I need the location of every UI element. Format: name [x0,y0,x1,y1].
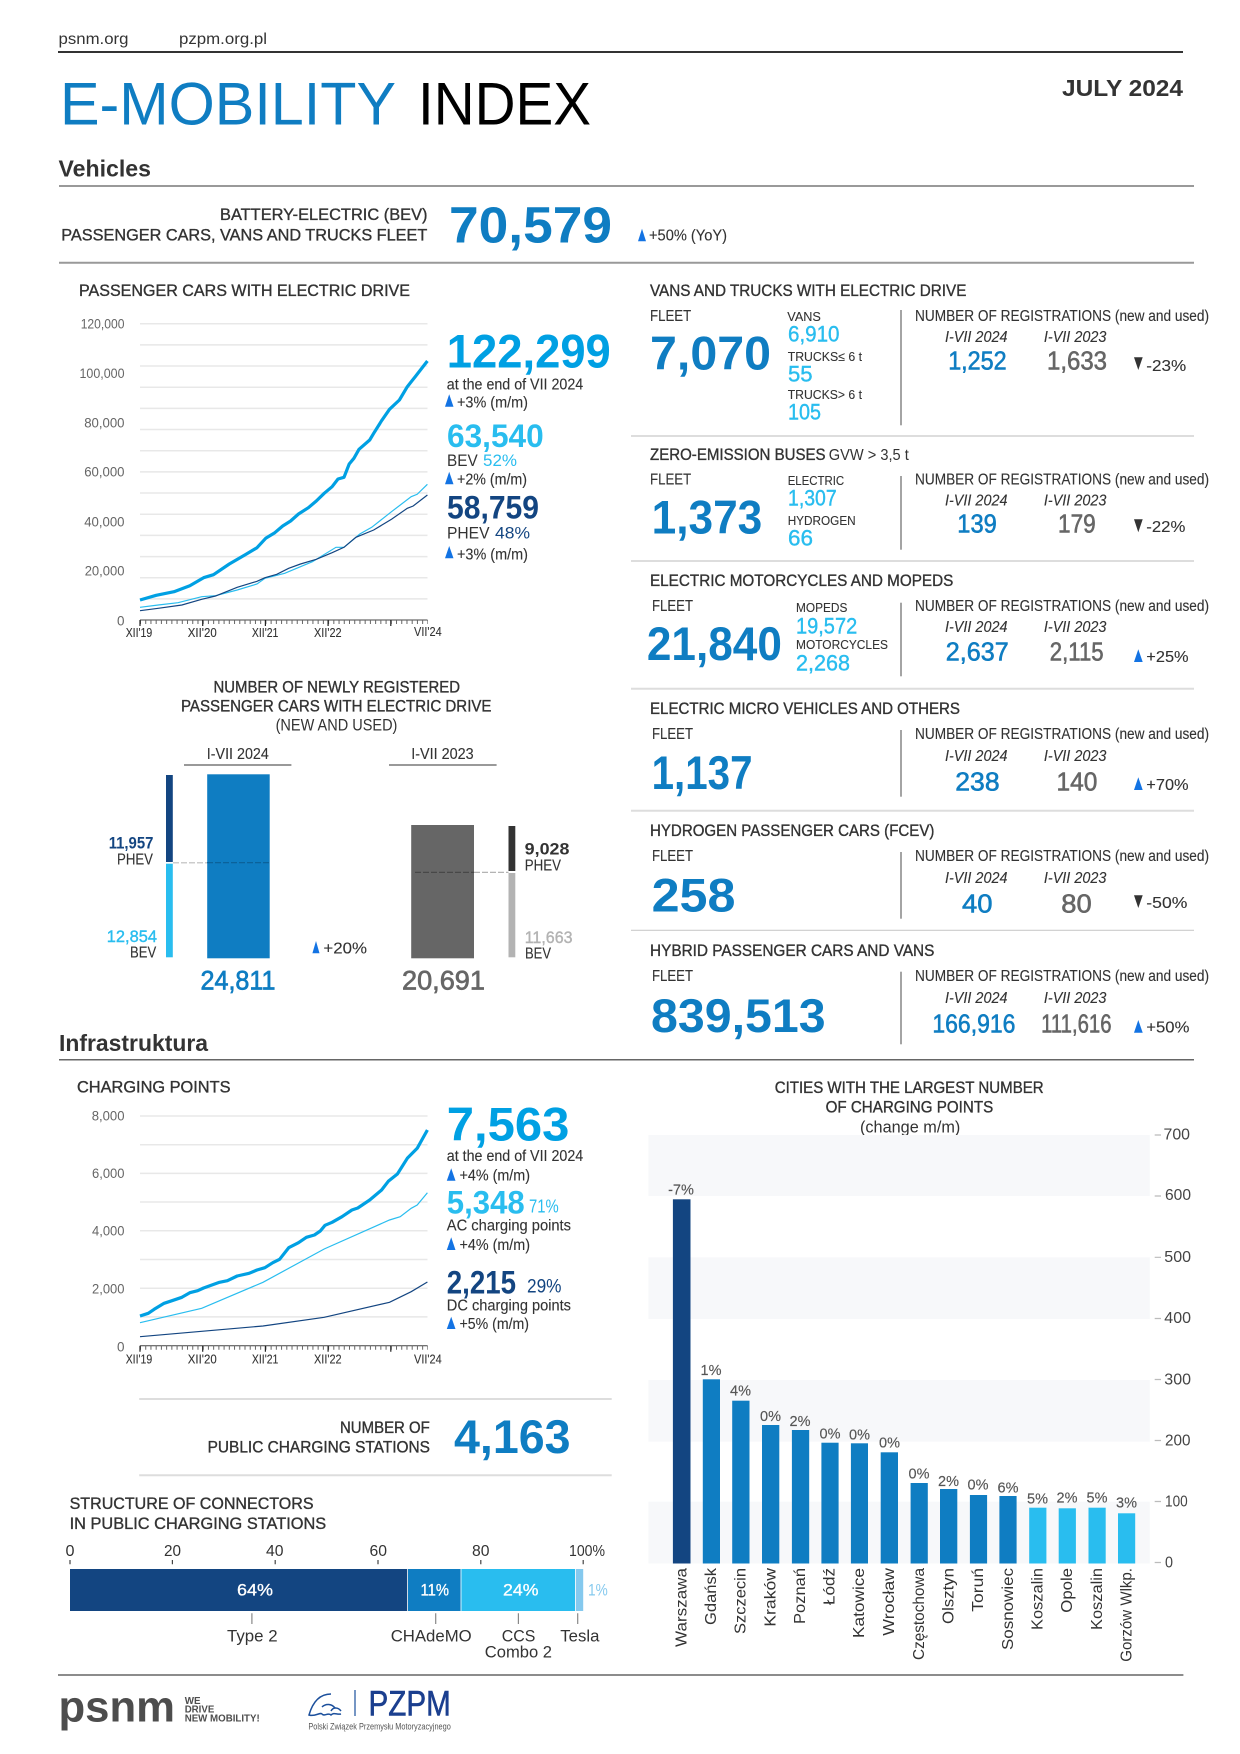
BEV fleet number: 70,579 [449,197,612,254]
date: JULY 2024 [1062,75,1183,101]
panel: motorcycles and mopeds: I-VII 2024 [945,619,1008,636]
panel: micro vehicles: I-VII 2023 [1044,748,1107,765]
panel: passenger car stats: +3% (m/m) [457,394,528,411]
change labels: 0% [909,1467,930,1483]
panel: hybrid cars [650,942,1209,1044]
panel: vans and trucks: I-VII 2024 [945,329,1008,346]
panel: vans and trucks: 1,252 [948,345,1007,375]
percentage axis: 60 [370,1543,387,1560]
period 2023: I-VII 2023 [411,746,474,763]
percentage axis: 100% [569,1543,605,1560]
connector labels: CCS [502,1627,535,1646]
change: +20% [323,940,367,957]
change labels: 2% [1057,1491,1078,1507]
panel: passenger car stats: 52% [483,452,517,470]
x axis: VII'24 [414,1352,442,1366]
x axis [126,620,442,640]
heading: vehicles: Vehicles [58,156,151,182]
change labels: 4% [730,1383,751,1399]
heading: PASSENGER CARS WITH ELECTRIC DRIVE [181,698,492,716]
stacked bar: 11% [420,1581,449,1600]
panel: hydrogen cars: I-VII 2024 [945,870,1008,887]
panel: zero-emission buses: GVW > 3,5 t [829,447,909,464]
line: PHEV [140,495,427,611]
connector labels [227,1613,600,1662]
panel: motorcycles and mopeds: I-VII 2023 [1044,619,1107,636]
panel: BEV fleet: BATTERY-ELECTRIC (BEV) [220,206,428,224]
panel: charging point stats: DC charging points [447,1298,571,1315]
panel: zero-emission buses: -22% [1146,519,1185,536]
heading [181,679,492,735]
panel: newly registered passenger cars [107,679,573,995]
bars [673,1199,1135,1564]
panel: charging point stats: 71% [529,1197,559,1217]
panel: passenger car stats: BEV [447,452,478,470]
heading [775,1079,1044,1136]
logo: PZPM [308,1685,451,1732]
percentage axis: 0 [66,1543,75,1560]
heading: OF CHARGING POINTS [826,1098,993,1116]
percentage axis [66,1543,605,1564]
title: INDEX [418,70,591,138]
panel: micro vehicles: 238 [955,767,1000,797]
panel: hybrid cars: I-VII 2023 [1044,990,1107,1007]
panel: passenger car stats: +3% (m/m) [457,546,528,563]
city labels: Warszawa [674,1568,690,1647]
heading: (NEW AND USED) [276,717,397,735]
header links: pzpm.org.pl [179,31,267,48]
panel: hybrid cars: I-VII 2024 [945,990,1008,1007]
panel: zero-emission buses: ELECTRIC [788,473,844,488]
panel: vans and trucks: FLEET [650,308,691,325]
label BEV 2024: BEV [130,944,156,961]
line: DC [140,1282,427,1337]
panel: micro vehicles: +70% [1146,777,1189,794]
panel: micro vehicles: ELECTRIC MICRO VEHICLES AND OTHERS [650,700,960,718]
panel: charging points chart [77,1079,442,1366]
right axis: 0 [1165,1554,1173,1572]
change labels: 5% [1027,1492,1048,1508]
city labels [674,1567,1136,1662]
city labels: Katowice [851,1568,868,1638]
panel: motorcycles and mopeds: 2,268 [796,650,850,675]
panel: micro vehicles: I-VII 2024 [945,748,1008,765]
panel: motorcycles and mopeds: 2,115 [1050,637,1104,667]
panel: charging point stats: at the end of VII 2024 [447,1148,584,1165]
panel: vans and trucks: VANS AND TRUCKS WITH ELECTRIC DRIVE [650,282,966,300]
bar 2024 [207,774,270,958]
panel: hydrogen cars: -50% [1146,895,1187,912]
logo: psnm: DRIVE [185,1705,215,1716]
city labels: Gdańsk [703,1567,720,1625]
heading: PASSENGER CARS WITH ELECTRIC DRIVE [79,282,410,300]
y axis labels: 20,000 [85,564,124,579]
x axis: XII'19 [126,1352,152,1366]
heading: NUMBER OF NEWLY REGISTERED [214,679,460,697]
heading: CHARGING POINTS [77,1079,230,1097]
panel: zero-emission buses: I-VII 2024 [945,492,1008,509]
percentage axis: 80 [472,1543,490,1560]
title: E-MOBILITY [60,70,396,138]
panel: zero-emission buses: ZERO-EMISSION BUSES [650,446,826,464]
right axis: 600 [1165,1187,1191,1204]
panel: passenger car stats: 48% [495,525,530,543]
panel: hydrogen cars: FLEET [652,848,693,865]
DC number: 2,215 [447,1264,516,1300]
connector labels: CHAdeMO [391,1627,472,1646]
heading: IN PUBLIC CHARGING STATIONS [70,1515,326,1533]
line: AC [140,1193,427,1323]
panel: hydrogen cars: I-VII 2023 [1044,870,1107,887]
label PHEV 2023: 9,028 [525,839,569,858]
label PHEV 2023 [525,839,569,875]
panel: micro vehicles: 140 [1056,767,1097,797]
header links: psnm.org [58,31,128,48]
label PHEV 2024: PHEV [117,852,153,869]
panel: hydrogen cars: HYDROGEN PASSENGER CARS (FCEV) [650,822,934,840]
connector labels: Tesla [560,1627,600,1646]
label BEV 2024 [107,927,157,961]
logo: psnm: NEW MOBILITY! [185,1714,260,1725]
change labels: 5% [1087,1491,1108,1507]
city labels: Łódź [822,1568,838,1605]
period 2024: I-VII 2024 [207,746,269,763]
heading: STRUCTURE OF CONNECTORS [70,1495,314,1513]
x axis: XII'22 [314,626,342,640]
icon: up arrow [638,229,646,241]
panel: BEV fleet: PASSENGER CARS, VANS AND TRUCKS FLEET [61,226,427,244]
icon: car outline [309,1694,341,1715]
panel: vans and trucks: 6,910 [788,322,840,347]
x axis: VII'24 [414,625,442,639]
panel: vans and trucks: TRUCKS≤ 6 t [788,349,862,364]
panel: hybrid cars: +50% [1146,1020,1189,1037]
panel: hydrogen cars: NUMBER OF REGISTRATIONS (new and used) [915,848,1209,865]
heading: (change m/m) [860,1118,960,1136]
label BEV 2023: 11,663 [525,928,573,947]
panel: motorcycles and mopeds: NUMBER OF REGISTRATIONS (new and used) [915,598,1209,615]
panel: zero-emission buses [650,446,1209,551]
panel: hydrogen cars: 258 [652,868,736,922]
panel: motorcycles and mopeds: 2,637 [946,637,1009,667]
right axis: 500 [1164,1249,1191,1266]
panel: charging point stats: +4% (m/m) [460,1168,530,1185]
logo: psnm: psnm [58,1683,175,1732]
panel: hybrid cars: 839,513 [651,989,826,1042]
connector labels: Combo 2 [485,1643,552,1662]
change labels [668,1182,1137,1512]
city labels: Poznań [792,1568,809,1624]
label PHEV 2023: PHEV [525,858,561,875]
label BEV 2023 [525,928,573,962]
percentage axis: 40 [266,1543,284,1560]
period 2024 [184,746,291,765]
split bar 2023 [508,826,515,957]
panel: zero-emission buses: 1,307 [788,486,837,511]
panel: public charging stations: NUMBER OF [340,1419,430,1437]
change labels: -7% [668,1182,694,1198]
panel: hybrid cars: 166,916 [932,1009,1015,1039]
logo: PZPM: Polski Związek Przemysłu Motoryzacyjnego [308,1721,451,1732]
change labels: 0% [760,1409,781,1425]
panel: zero-emission buses: 139 [957,509,997,539]
panel: motorcycles and mopeds: 21,840 [647,617,782,670]
panel: charging point stats: +5% (m/m) [460,1316,529,1333]
total 2023: 20,691 [402,965,485,995]
y axis labels [92,1109,124,1354]
city labels: Olsztyn [940,1568,958,1624]
panel: hydrogen cars: 40 [962,888,992,918]
panel: passenger car stats: +2% (m/m) [457,471,527,488]
y axis labels: 100,000 [80,366,124,381]
y axis labels: 80,000 [84,416,124,431]
panel: zero-emission buses: 1,373 [652,490,762,544]
y axis labels: 40,000 [84,515,124,530]
connector labels: Type 2 [227,1627,278,1646]
panel: passenger car stats [445,325,611,563]
panel: motorcycles and mopeds: MOTORCYCLES [796,637,888,652]
panel: zero-emission buses: NUMBER OF REGISTRATIONS (new and used) [915,472,1209,488]
panel: vans and trucks: TRUCKS> 6 t [788,387,862,402]
city labels: Toruń [970,1568,987,1612]
PHEV number: 58,759 [447,489,539,525]
change labels: 0% [849,1427,870,1443]
label BEV 2024: 12,854 [107,927,157,946]
y axis labels: 60,000 [84,465,124,480]
total 2024: 24,811 [200,965,276,995]
panel: public charging stations [208,1410,571,1463]
city labels: Sosnowiec [1000,1568,1017,1650]
panel: charging point stats [447,1098,584,1333]
panel: micro vehicles: 1,137 [652,746,752,799]
y axis labels: 120,000 [81,317,124,332]
stacked bar: 1% [588,1581,608,1600]
stacked bar [70,1569,608,1611]
panel: charging point stats: 29% [527,1277,562,1298]
panel: zero-emission buses: I-VII 2023 [1044,492,1107,509]
percentage axis: 20 [164,1543,181,1560]
panel: zero-emission buses: FLEET [650,472,691,488]
panel: motorcycles and mopeds: FLEET [652,598,693,615]
panel: vans and trucks: I-VII 2023 [1044,329,1107,346]
panel: vans and trucks: 7,070 [650,326,771,380]
title [60,70,591,138]
panel: vans and trucks: NUMBER OF REGISTRATIONS (new and used) [915,308,1209,325]
panel: passenger cars chart [79,282,442,640]
heading: CITIES WITH THE LARGEST NUMBER [775,1079,1044,1097]
y axis labels: 2,000 [92,1281,124,1296]
panel: hydrogen cars [650,822,1209,922]
BEV number: 63,540 [447,418,544,454]
line: BEV [140,484,427,607]
x axis: XII'19 [126,626,152,640]
label PHEV 2024 [109,834,153,869]
panel: motorcycles and mopeds: ELECTRIC MOTORCYCLES AND MOPEDS [650,572,953,590]
total number: 122,299 [447,325,611,378]
panel: hybrid cars: 111,616 [1041,1009,1112,1039]
city labels: Opole [1059,1568,1076,1613]
line: total [140,361,427,600]
city labels: Koszalin [1030,1568,1046,1630]
x axis: XII'22 [314,1352,342,1366]
total number: 7,563 [447,1098,569,1151]
split bar 2024 [166,775,173,957]
logo: psnm: WE [185,1696,201,1707]
city labels: Kraków [762,1568,780,1627]
right axis: 400 [1164,1310,1191,1327]
panel: public charging stations: PUBLIC CHARGING STATIONS [208,1438,430,1456]
panel: vans and trucks: VANS [787,309,821,324]
panel: motorcycles and mopeds: MOPEDS [796,600,848,615]
change labels: 2% [790,1414,811,1430]
city labels: Gorzów Wlkp. [1118,1568,1136,1662]
city labels: Koszalin [1089,1568,1106,1630]
AC number: 5,348 [447,1184,525,1220]
y axis labels: 8,000 [92,1109,124,1124]
panel: micro vehicles: NUMBER OF REGISTRATIONS (new and used) [915,726,1209,743]
heading: infrastructure: Infrastruktura [59,1030,208,1056]
panel: zero-emission buses: 179 [1058,509,1096,539]
change labels: 0% [968,1477,989,1493]
right axis [1155,1126,1191,1572]
change labels: 1% [701,1363,722,1379]
y axis labels: 6,000 [92,1166,124,1181]
panel: passenger car stats: at the end of VII 2024 [447,376,584,393]
panel: vans and trucks: 1,633 [1047,345,1107,375]
panel: passenger car stats: PHEV [447,525,490,543]
y axis labels [80,317,124,629]
change labels: 0% [879,1436,900,1452]
panel: cities bar chart [648,1079,1191,1662]
panel: vans and trucks: 105 [788,399,821,424]
right axis: 100 [1165,1494,1188,1510]
panel: structure of connectors [66,1495,608,1662]
x axis: XII'21 [252,626,278,640]
period 2023 [389,746,497,765]
change: +50% (YoY) [649,228,727,245]
city labels: Częstochowa [911,1568,928,1660]
right axis: 200 [1165,1432,1191,1450]
y axis labels: 0 [117,1339,124,1354]
panel: zero-emission buses: 66 [788,526,813,551]
panel: hybrid cars: HYBRID PASSENGER CARS AND VANS [650,942,934,960]
x axis: XII'20 [188,626,217,640]
x axis [126,1346,442,1366]
heading [70,1495,326,1533]
panel: motorcycles and mopeds [647,572,1209,676]
change labels: 6% [998,1481,1019,1497]
panel: hydrogen cars: 80 [1061,888,1092,918]
panel: micro vehicles [650,700,1209,799]
right axis: 700 [1164,1126,1190,1144]
y axis labels: 0 [117,614,124,629]
stacked bar: 64% [237,1581,273,1600]
header links [58,31,267,48]
panel: motorcycles and mopeds: +25% [1146,649,1189,666]
bar 2023 [411,825,474,958]
panel: zero-emission buses: HYDROGEN [788,513,856,528]
panel: vans and trucks: 55 [788,362,813,387]
change labels: 0% [820,1427,841,1443]
panel: hybrid cars: FLEET [652,968,693,985]
stations number: 4,163 [454,1410,571,1463]
city labels: Szczecin [732,1568,750,1634]
stacked bar: 24% [503,1581,538,1600]
label BEV 2023: BEV [525,945,551,962]
logo: PZPM: PZPM [368,1685,451,1724]
panel: vans and trucks [650,282,1209,425]
panel: vans and trucks: -23% [1146,358,1186,375]
panel: charging point stats: +4% (m/m) [460,1237,530,1254]
line: total [140,1130,427,1316]
city labels: Wrocław [881,1568,898,1636]
panel: BEV fleet [61,197,727,254]
label PHEV 2024: 11,957 [109,834,153,853]
change labels: 2% [938,1474,959,1490]
panel: micro vehicles: FLEET [652,726,693,743]
x axis: XII'20 [188,1352,217,1366]
change labels: 3% [1116,1496,1137,1512]
panel: charging point stats: AC charging points [447,1218,571,1235]
logo: psnm [58,1683,260,1732]
panel: motorcycles and mopeds: 19,572 [796,613,857,638]
right axis: 300 [1164,1372,1191,1388]
y axis labels: 4,000 [92,1223,124,1238]
panel: hybrid cars: NUMBER OF REGISTRATIONS (new and used) [915,968,1209,985]
x axis: XII'21 [252,1352,278,1366]
